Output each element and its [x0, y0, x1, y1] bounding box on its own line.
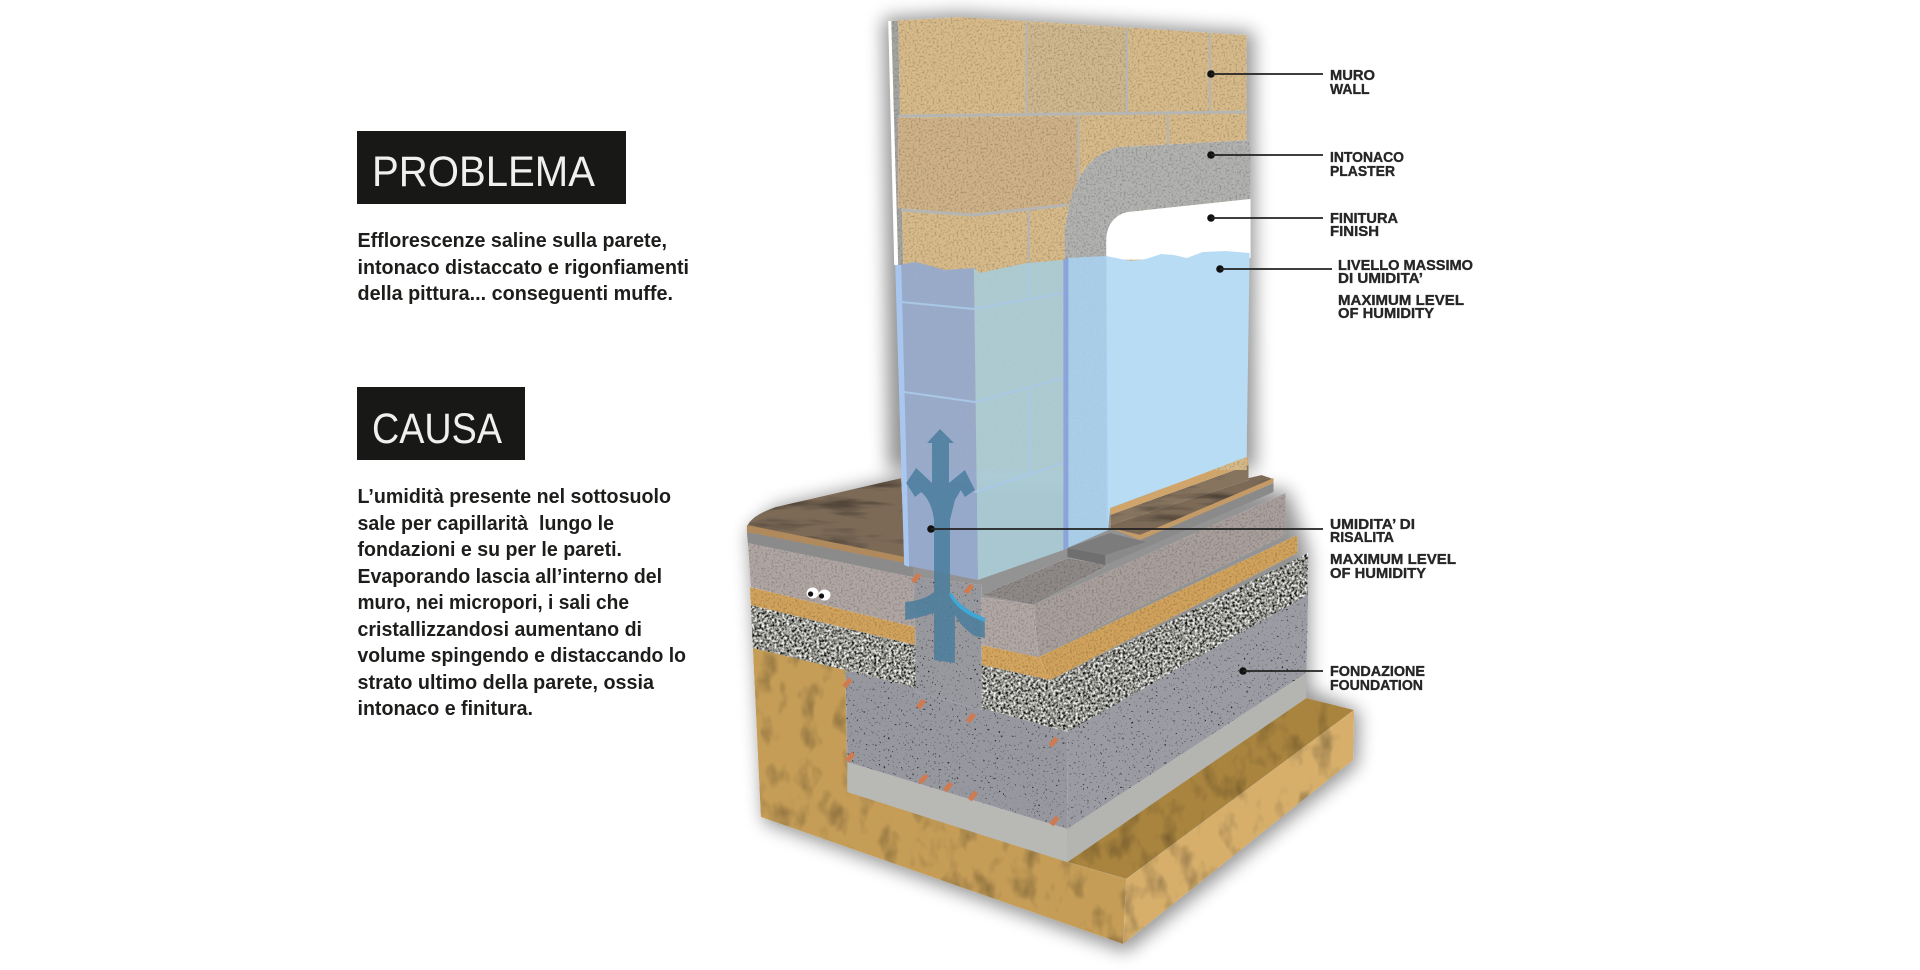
heading: problema	[357, 131, 626, 204]
callout: intonaco: PLASTER	[1330, 164, 1396, 180]
callout: livello massimo di umidita: MAXIMUM LEVEL	[1338, 293, 1464, 309]
text block: causa description: cristallizzandosi aumentano di	[358, 619, 642, 641]
text block: causa description: sale per capillarità lungo le	[358, 513, 614, 535]
humidity overlay: finish	[1106, 251, 1250, 528]
drop shadow	[749, 13, 1359, 952]
wall edge strips	[895, 258, 1068, 567]
icon: eyes	[807, 588, 831, 600]
heading: causa	[357, 387, 525, 460]
callout: intonaco	[1207, 150, 1404, 180]
heading: problema: PROBLEMA	[372, 148, 595, 196]
text block: causa description: fondazioni e su per le pareti.	[358, 539, 622, 561]
callout: muro	[1207, 68, 1375, 98]
callout: finitura: FINISH	[1330, 224, 1379, 240]
text block: causa description: Evaporando lascia all’interno del	[358, 566, 662, 588]
text block: problema description: Efflorescenze saline sulla parete,	[358, 230, 667, 252]
callout: fondazione: FOUNDATION	[1330, 678, 1423, 694]
floor: left wood planks	[747, 478, 905, 563]
diagram: wall and foundation cross-section	[747, 13, 1359, 952]
left stack: tan sand layer	[750, 587, 915, 645]
callout: finitura	[1207, 211, 1399, 240]
callout: livello massimo di umidita	[1216, 258, 1473, 322]
left stack: gravel aggregate	[751, 605, 916, 688]
text block: problema description: intonaco distaccato e rigonfiamenti	[358, 257, 689, 279]
humidity overlay: wall left face	[898, 262, 978, 580]
text block: problema description	[358, 230, 689, 305]
heading: causa: CAUSA	[372, 405, 502, 453]
left stack: grey screed	[747, 532, 913, 577]
plaster layer	[1064, 140, 1251, 548]
callout: umidita di risalita	[927, 517, 1456, 582]
text block: causa description	[358, 486, 686, 720]
callout: umidita di risalita: OF HUMIDITY	[1330, 566, 1426, 582]
callout: fondazione	[1239, 664, 1425, 694]
text block: causa description: volume spingendo e distaccando lo	[358, 645, 686, 667]
callout: livello massimo di umidita: OF HUMIDITY	[1338, 306, 1434, 322]
floor: right screed and block	[1067, 483, 1273, 565]
humidity overlay: wall right face	[974, 260, 1063, 580]
text block: problema description: della pittura... conseguenti muffe.	[358, 283, 673, 305]
right stack: concrete slab	[982, 493, 1285, 656]
callout: umidita di risalita: RISALITA	[1330, 530, 1395, 546]
foundation block: wood formwork	[753, 648, 1354, 944]
humidity overlay: joints	[901, 263, 1063, 492]
right stack: tan sand layer	[982, 535, 1297, 680]
floor: right wood planks	[1110, 475, 1273, 540]
panel: causa	[357, 387, 686, 720]
text block: causa description: L’umidità presente nel sottosuolo	[358, 486, 671, 508]
callout: fondazione: FONDAZIONE	[1330, 664, 1425, 680]
bricks fragments in concrete	[842, 573, 1060, 826]
left stack: concrete slab	[748, 543, 915, 627]
callout: livello massimo di umidita: LIVELLO MASSIMO	[1338, 258, 1473, 274]
callout: intonaco: INTONACO	[1330, 150, 1404, 166]
arrow: rising damp	[905, 429, 985, 663]
wall: mortar joints	[898, 22, 1246, 262]
skirting board	[1110, 457, 1249, 525]
foundation concrete	[845, 577, 1308, 829]
finish layer	[1106, 199, 1251, 260]
text block: causa description: strato ultimo della parete, ossia	[358, 672, 655, 694]
text block: causa description: intonaco e finitura.	[358, 698, 533, 720]
panel: problema	[357, 131, 689, 305]
right stack: gravel aggregate	[982, 553, 1308, 732]
callout: finitura: FINITURA	[1330, 211, 1399, 227]
callout: muro: MURO	[1330, 68, 1375, 84]
callout: livello massimo di umidita: DI UMIDITA’	[1338, 271, 1423, 287]
callout: muro: WALL	[1330, 82, 1370, 98]
text block: causa description: muro, nei micropori, i sali che	[358, 592, 629, 614]
lean concrete base	[847, 673, 1306, 862]
callout: umidita di risalita: UMIDITA’ DI	[1330, 517, 1415, 533]
callout: umidita di risalita: MAXIMUM LEVEL	[1330, 552, 1456, 568]
humidity overlay: plaster	[1067, 256, 1108, 548]
wall: brick faces	[888, 17, 1247, 470]
